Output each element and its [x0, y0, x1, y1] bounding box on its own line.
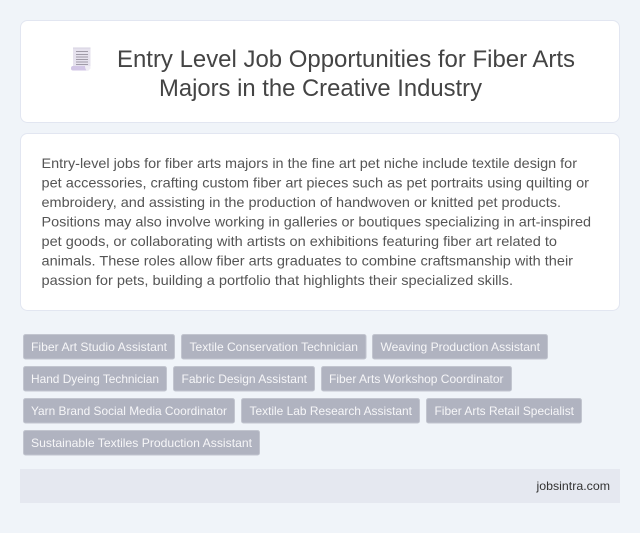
tag: Fiber Arts Retail Specialist [426, 398, 582, 423]
panel: description [20, 134, 620, 310]
description text: pet goods, or collaborating with artists on exhibitions featuring fiber art related to [42, 233, 557, 249]
tag: Fiber Arts Workshop Coordinator: Fiber Arts Workshop Coordinator [329, 372, 504, 386]
tag: Fiber Art Studio Assistant [24, 334, 174, 359]
tag: Sustainable Textiles Production Assistant [24, 430, 260, 455]
tag: Hand Dyeing Technician: Hand Dyeing Technician [31, 372, 159, 386]
description text: embroidery, and assisting in the production of handwoven or knitted pet products. [42, 194, 561, 210]
description text: Positions may also involve working in galleries or boutiques specializing in art-inspired [42, 214, 591, 230]
description text [42, 155, 591, 288]
tag: Fiber Arts Retail Specialist: Fiber Arts Retail Specialist [434, 404, 575, 418]
footer bar [20, 469, 620, 503]
tag: Textile Conservation Technician: Textile Conservation Technician [190, 340, 358, 354]
tag: Textile Lab Research Assistant: Textile Lab Research Assistant [250, 404, 413, 418]
tag: Textile Lab Research Assistant [242, 398, 420, 423]
description text: animals. These roles allow fiber arts graduates to combine craftsmanship with their [42, 252, 573, 268]
tag: Sustainable Textiles Production Assistant: Sustainable Textiles Production Assistant [31, 436, 253, 450]
title line 2: Majors in the Creative Industry [159, 75, 482, 102]
tag: Fabric Design Assistant [174, 366, 314, 391]
footer source text: jobsintra.com [535, 479, 610, 493]
job tags [24, 334, 582, 455]
tag: Fiber Art Studio Assistant: Fiber Art Studio Assistant [31, 340, 168, 354]
panel: title header [20, 20, 620, 122]
description text: passion for pets, building a portfolio that highlights their specialized skills. [42, 272, 513, 288]
icon: paper scroll [71, 48, 90, 71]
tag: Textile Conservation Technician [182, 334, 366, 359]
tag: Yarn Brand Social Media Coordinator [24, 398, 234, 423]
tag: Fabric Design Assistant: Fabric Design Assistant [182, 372, 308, 386]
tag: Hand Dyeing Technician [24, 366, 166, 391]
title line 1: Entry Level Job Opportunities for Fiber Arts [117, 46, 575, 73]
description text: Entry-level jobs for fiber arts majors in the fine art pet niche include textile design for [42, 155, 577, 171]
description text: pet accessories, crafting custom fiber art pieces such as pet portraits using quilting or [42, 174, 589, 190]
tag: Weaving Production Assistant: Weaving Production Assistant [380, 340, 541, 354]
tag: Weaving Production Assistant [372, 334, 548, 359]
tag: Fiber Arts Workshop Coordinator [322, 366, 512, 391]
tag: Yarn Brand Social Media Coordinator: Yarn Brand Social Media Coordinator [31, 404, 227, 418]
